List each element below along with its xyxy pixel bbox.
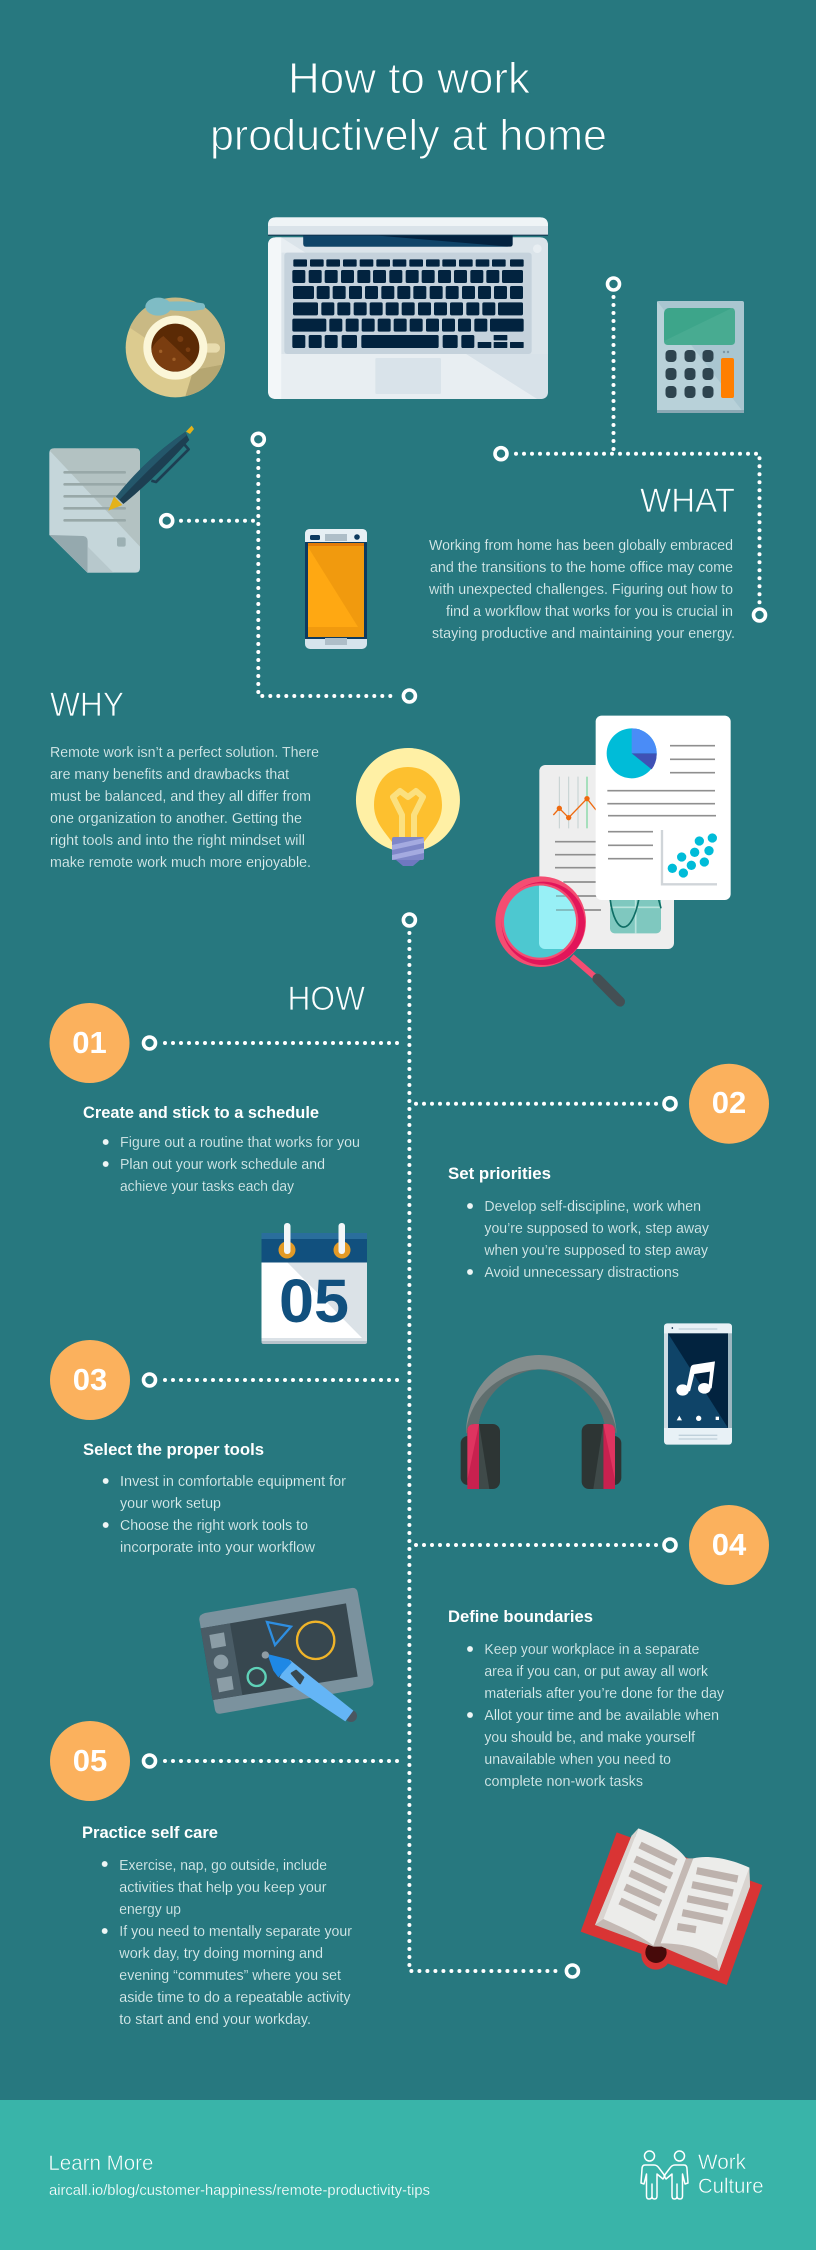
step 01 — [50, 1003, 401, 1195]
connector 05 — [144, 1755, 401, 1767]
heading: create and stick: Create and stick to a schedule — [83, 1103, 319, 1122]
text block: why: right tools and into the right mindset will — [50, 832, 305, 849]
title: How to work — [288, 54, 531, 103]
heading: select tools: Select the proper tools — [83, 1440, 264, 1459]
icon: coffee cup — [126, 298, 225, 397]
panel: what text — [428, 482, 735, 642]
heading: practice self care: Practice self care — [82, 1823, 218, 1842]
list: create and stick: Figure out a routine that works for you — [120, 1134, 360, 1151]
list: practice self care — [102, 1857, 352, 2028]
list: practice self care: energy up — [119, 1901, 181, 1918]
text block: what: Working from home has been globally embraced — [429, 537, 733, 554]
list: set priorities: Avoid unnecessary distractions — [484, 1264, 679, 1281]
footer band — [0, 2100, 816, 2250]
text: work culture: Work — [698, 2151, 746, 2174]
list: create and stick — [103, 1134, 360, 1195]
list: set priorities: you’re supposed to work, step away — [484, 1220, 709, 1237]
list: define boundaries: you should be, and make yourself — [484, 1729, 696, 1746]
list: select tools: Invest in comfortable equipment for — [120, 1473, 346, 1490]
icon: laptop — [268, 217, 548, 399]
number badge 02: 02 — [712, 1085, 746, 1120]
connector 02 — [416, 1098, 676, 1110]
list: define boundaries: unavailable when you need to — [484, 1751, 671, 1768]
list: define boundaries: area if you can, or put away all work — [484, 1663, 708, 1680]
text block: what: staying productive and maintaining your energy. — [432, 625, 735, 642]
icon: open book — [581, 1828, 762, 1985]
icon: headphones and music phone — [461, 1323, 732, 1489]
list: create and stick: Plan out your work schedule and — [120, 1156, 325, 1173]
step 03 — [50, 1340, 401, 1556]
text block: why: must be balanced, and they all differ from — [50, 788, 311, 805]
text block: what — [428, 537, 735, 642]
heading: what: WHAT — [640, 482, 735, 520]
list: select tools: incorporate into your workflow — [120, 1539, 315, 1556]
list: set priorities: Develop self-discipline, work when — [484, 1198, 701, 1215]
list: set priorities: when you’re supposed to step away — [483, 1242, 708, 1259]
list: define boundaries: Allot your time and be available when — [484, 1707, 719, 1724]
panel: why text — [50, 686, 319, 871]
text block: what: and the transitions to the home office may come — [430, 559, 733, 576]
icon: calendar — [262, 1223, 367, 1344]
icon: drawing tablet — [199, 1588, 373, 1722]
connector: what path — [495, 278, 766, 621]
list: define boundaries: complete non-work tasks — [484, 1773, 643, 1790]
icon: light bulb — [356, 748, 460, 866]
footer: learn more — [48, 2152, 430, 2199]
title: productively at home — [210, 111, 607, 160]
footer: work culture logo — [641, 2151, 764, 2199]
number badge 05: 05 — [73, 1743, 107, 1778]
number badge 02 — [689, 1064, 769, 1144]
text: work culture — [698, 2151, 764, 2198]
text: work culture: Culture — [698, 2175, 764, 2198]
list: practice self care: evening “commutes” where you set — [119, 1967, 342, 1984]
icon: music phone — [664, 1323, 732, 1445]
icon: calendar: 05 — [279, 1267, 349, 1335]
text block: why: make remote work much more enjoyable. — [50, 854, 311, 871]
connector: how spine — [403, 914, 578, 1977]
heading: how: HOW — [288, 980, 365, 1018]
connector 01 — [144, 1037, 401, 1049]
icon: headphones — [461, 1355, 621, 1489]
icon: paper and pen — [49, 426, 194, 573]
list: define boundaries: materials after you’re done for the day — [484, 1685, 724, 1702]
list: set priorities — [467, 1198, 709, 1281]
text block: why: Remote work isn’t a perfect solution. There — [50, 744, 319, 761]
list: select tools: your work setup — [120, 1495, 221, 1512]
heading: set priorities: Set priorities — [448, 1164, 551, 1183]
list: define boundaries: Keep your workplace in a separate — [484, 1641, 699, 1658]
step 05 — [50, 1721, 401, 2028]
list: create and stick: achieve your tasks each day — [120, 1178, 294, 1195]
icon: calculator — [657, 301, 744, 413]
title — [210, 54, 607, 160]
step 04 — [416, 1505, 769, 1790]
list: define boundaries — [467, 1641, 724, 1790]
list: practice self care: If you need to mentally separate your — [119, 1923, 352, 1940]
text block: what: find a workflow that works for you is crucial in — [446, 603, 733, 620]
text block: why: are many benefits and drawbacks that — [50, 766, 290, 783]
number badge 01: 01 — [72, 1025, 107, 1060]
footer: learn more: aircall.io/blog/customer-happiness/remote-productivity-tips — [49, 2182, 430, 2199]
icon: orange phone — [305, 529, 367, 649]
step 02 — [416, 1064, 769, 1281]
icon: documents and magnifier — [495, 716, 731, 1002]
number badge 03 — [50, 1340, 130, 1420]
footer: learn more: Learn More — [48, 2152, 153, 2175]
list: practice self care: work day, try doing morning and — [118, 1945, 323, 1962]
text block: what: with unexpected challenges. Figuring out how to — [428, 581, 733, 598]
list: practice self care: to start and end your workday. — [119, 2011, 311, 2028]
text block: why — [50, 744, 319, 871]
number badge 04 — [689, 1505, 769, 1585]
connector 03 — [144, 1374, 401, 1386]
number badge 03: 03 — [73, 1362, 107, 1397]
list: select tools — [103, 1473, 346, 1556]
heading: define boundaries: Define boundaries — [448, 1607, 593, 1626]
connector 04 — [416, 1539, 676, 1551]
list: practice self care: activities that help you keep your — [119, 1879, 327, 1896]
icon: two people shaking hands — [641, 2151, 688, 2199]
heading: why: WHY — [50, 686, 124, 724]
list: practice self care: aside time to do a repeatable activity — [119, 1989, 351, 2006]
number badge 01 — [50, 1003, 130, 1083]
list: select tools: Choose the right work tools to — [120, 1517, 308, 1534]
connector: side path — [161, 433, 415, 702]
number badge 04: 04 — [712, 1527, 747, 1562]
number badge 05 — [50, 1721, 130, 1801]
list: practice self care: Exercise, nap, go outside, include — [119, 1857, 327, 1874]
text block: why: one organization to another. Getting the — [50, 810, 302, 827]
